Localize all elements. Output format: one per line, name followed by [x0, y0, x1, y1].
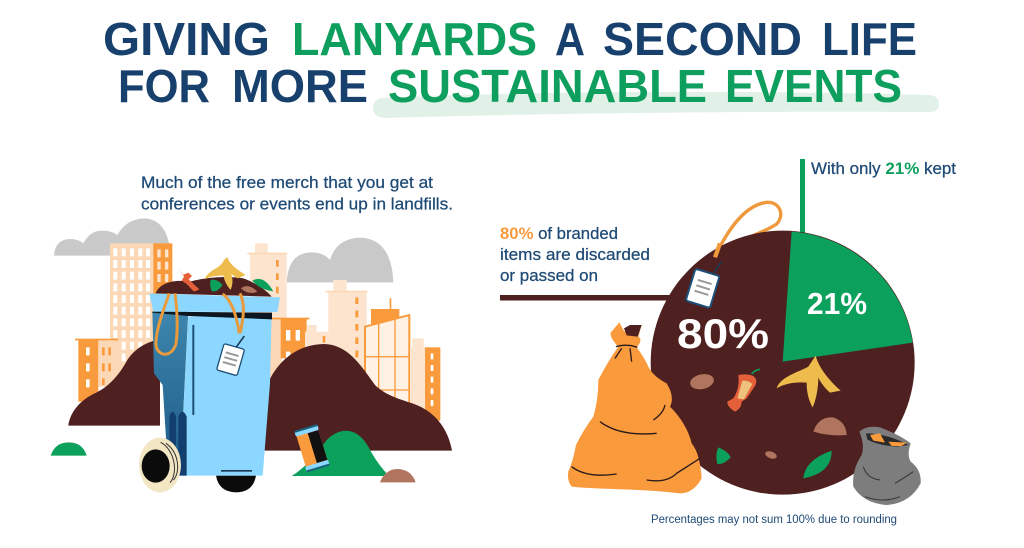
- callout: with only 21% kept: With only 21% kept: [811, 160, 956, 178]
- footnote: Percentages may not sum 100% due to rounding: [651, 514, 897, 526]
- landfill mounds: [68, 339, 452, 451]
- callout: 80% discarded: 80% of branded: [500, 225, 618, 243]
- callout: 80% discarded: items are discarded: [500, 246, 650, 264]
- pie slice: 21%: [783, 232, 913, 362]
- wheel left: [139, 438, 181, 492]
- grey bag: [853, 427, 921, 505]
- lanyard on bin: [156, 293, 243, 354]
- title: FOR: [118, 60, 210, 112]
- badge: [686, 255, 724, 308]
- title: SUSTAINABLE: [388, 60, 707, 112]
- pie label 80%: 80%: [677, 310, 769, 357]
- lanyard loop: [717, 202, 781, 252]
- intro text: Much of the free merch that you get at: [141, 174, 433, 192]
- wheelie bin: [149, 293, 280, 476]
- title: LIFE: [822, 13, 917, 65]
- title: A: [555, 13, 585, 65]
- trash pile on bin: [156, 257, 273, 297]
- line: 21% callout: [800, 159, 805, 235]
- title: MORE: [232, 60, 368, 112]
- pie chart with waste: [568, 202, 921, 505]
- title: EVENTS: [725, 60, 902, 112]
- title: GIVING: [103, 13, 270, 65]
- callout: 80% discarded: or passed on: [500, 267, 598, 285]
- callout: 80% discarded: [500, 225, 650, 285]
- can: [294, 424, 330, 472]
- lanyard strap: [715, 243, 720, 257]
- pie slice: 80%: [651, 231, 915, 495]
- line: 80% callout: [500, 295, 675, 300]
- title: SECOND: [603, 13, 802, 65]
- illustration: overflowing bin in landfill city: [51, 218, 452, 492]
- wheel right: [216, 476, 256, 492]
- buildings: [75, 243, 440, 421]
- title highlight brush: [373, 92, 939, 118]
- badge on bin: [217, 331, 248, 376]
- clouds: [54, 218, 393, 282]
- intro text: [141, 174, 453, 214]
- pie label 21%: 21%: [807, 286, 867, 321]
- green mound small: [51, 442, 87, 456]
- green hill: [292, 431, 389, 476]
- intro text: conferences or events end up in landfills.: [141, 196, 453, 214]
- orange bag: [568, 322, 702, 493]
- food scraps: [689, 356, 847, 478]
- title: LANYARDS: [292, 13, 537, 65]
- brown stone: [380, 469, 416, 482]
- title: [103, 13, 917, 112]
